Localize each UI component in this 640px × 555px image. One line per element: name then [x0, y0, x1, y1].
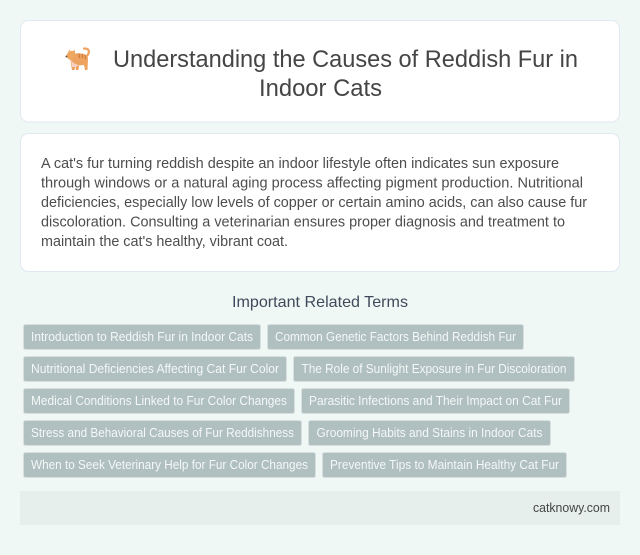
title: Indoor Cats	[259, 75, 382, 102]
tag: Preventive Tips to Maintain Healthy Cat Fur	[330, 458, 559, 472]
description text: through windows or a natural aging process affecting pigment production. Nutritional	[41, 176, 583, 192]
tag: Introduction to Reddish Fur in Indoor Cats	[31, 330, 253, 344]
tag	[268, 324, 524, 350]
description card	[20, 134, 620, 272]
tag	[322, 452, 566, 478]
tag	[24, 388, 294, 414]
tag	[294, 356, 574, 382]
tag	[24, 420, 302, 446]
icon: orange cat	[66, 48, 89, 70]
description text: discoloration. Consulting a veterinarian ensures proper diagnosis and treatment to	[41, 214, 565, 230]
tag	[24, 356, 286, 382]
tag: The Role of Sunlight Exposure in Fur Discoloration	[302, 362, 567, 376]
tag: Parasitic Infections and Their Impact on Cat Fur	[309, 394, 562, 408]
tag: Medical Conditions Linked to Fur Color Changes	[31, 394, 287, 408]
tag: When to Seek Veterinary Help for Fur Color Changes	[31, 458, 308, 472]
related terms tags	[24, 324, 574, 478]
header card	[20, 20, 620, 122]
footer: catknowy.com	[533, 500, 610, 515]
title: Understanding the Causes of Reddish Fur in	[113, 46, 578, 73]
tag	[24, 452, 316, 478]
tag	[24, 324, 260, 350]
description text: A cat's fur turning reddish despite an indoor lifestyle often indicates sun exposure	[41, 156, 559, 172]
tag: Grooming Habits and Stains in Indoor Cats	[316, 426, 542, 440]
footer	[20, 491, 620, 525]
tag	[302, 388, 570, 414]
title	[113, 46, 578, 102]
heading: related terms: Important Related Terms	[232, 294, 408, 311]
tag: Stress and Behavioral Causes of Fur Reddishness	[31, 426, 294, 440]
tag: Nutritional Deficiencies Affecting Cat Fur Color	[31, 362, 279, 376]
description text: maintain the cat's healthy, vibrant coat.	[41, 234, 288, 250]
tag: Common Genetic Factors Behind Reddish Fur	[275, 330, 516, 344]
description text: deficiencies, especially low levels of copper or certain amino acids, can also cause fur	[41, 195, 587, 211]
tag	[308, 420, 550, 446]
description text	[41, 156, 587, 250]
